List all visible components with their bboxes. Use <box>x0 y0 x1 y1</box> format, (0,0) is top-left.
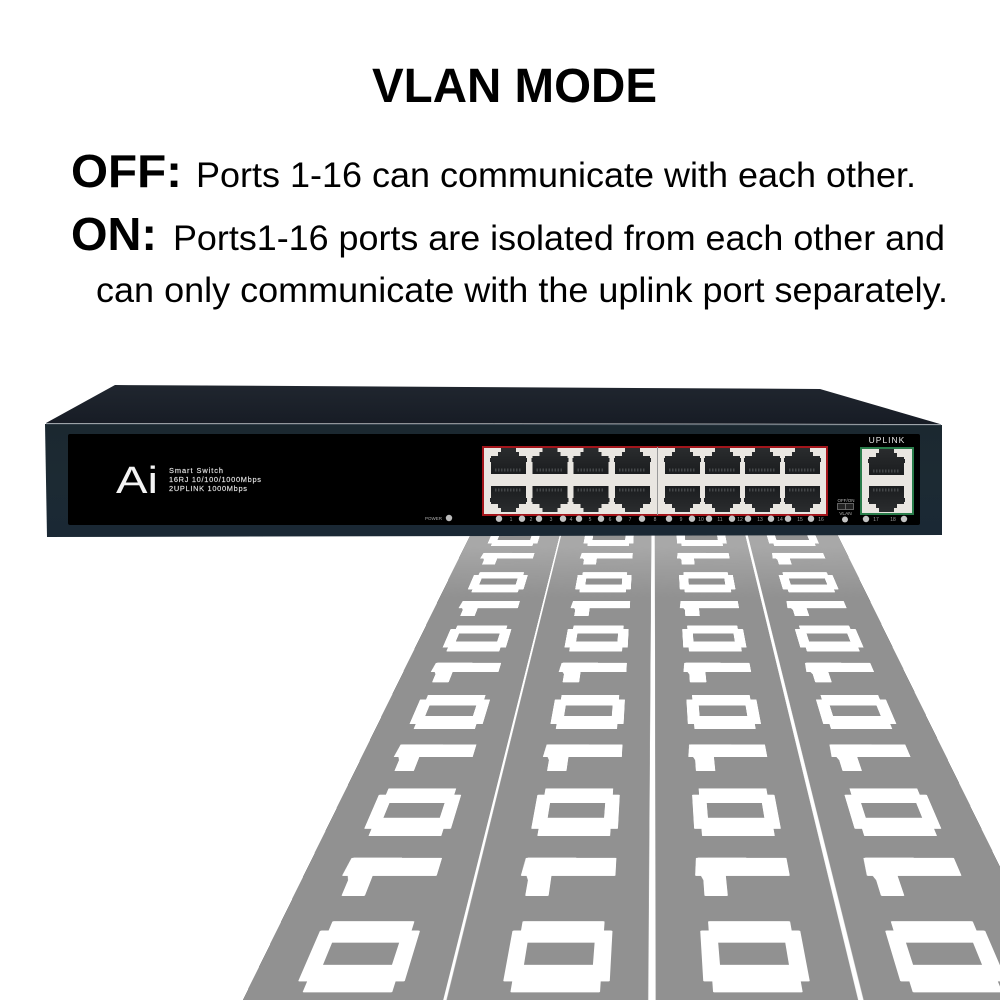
lane 1 digits: 1 <box>415 653 497 684</box>
ON mode text <box>71 208 948 310</box>
lane 2 digits: 0 <box>565 572 643 593</box>
port numbers: 12 <box>737 517 743 523</box>
OFF mode text <box>71 145 916 197</box>
port numbers: 16 <box>818 517 824 523</box>
black front panel <box>68 434 920 525</box>
model description <box>169 466 261 493</box>
lane 2 digits: 0 <box>515 787 638 837</box>
port numbers: 8 <box>654 517 657 523</box>
lane 4 digits: 1 <box>762 547 822 566</box>
port numbers: 1 <box>510 517 513 523</box>
lane 3 digits: 1 <box>669 547 725 566</box>
lane 4 digits: 1 <box>775 593 844 618</box>
lane 4 digits <box>757 529 1000 994</box>
ON mode text: ON: <box>71 208 157 260</box>
data road: four lanes of binary digits in perspective <box>243 529 1000 1000</box>
port numbers: 15 <box>797 517 803 523</box>
lane 1 digits: 0 <box>395 694 507 730</box>
lane 1 digits: 1 <box>317 838 438 900</box>
switch top face <box>46 385 940 424</box>
brand mark: Ai <box>116 460 158 502</box>
model description: 16RJ 10/100/1000Mbps <box>169 475 261 484</box>
lane 2 digits: 1 <box>502 838 607 900</box>
lane 3 digits <box>676 536 810 992</box>
lane 2 digits: 1 <box>546 653 620 684</box>
port numbers: 10 <box>698 517 704 523</box>
lane 2 digits: 0 <box>537 694 640 730</box>
lane 3 digits: 0 <box>675 694 778 730</box>
uplink LEDs and numbers: 17 <box>873 517 879 523</box>
lane 1 digits <box>298 536 540 992</box>
port numbers: 4 <box>570 517 573 523</box>
lane 3 digits: 0 <box>684 920 836 994</box>
lane divider 2 <box>648 516 656 1000</box>
model description: Smart Switch <box>169 466 223 475</box>
lane 3 digits: 1 <box>671 593 734 618</box>
lane 4 digits: 0 <box>829 787 964 837</box>
lane 3 digits: 0 <box>672 625 761 652</box>
lane 2 digits: 1 <box>571 547 627 566</box>
port numbers: 9 <box>680 517 683 523</box>
VLAN switch <box>838 498 854 522</box>
port LEDs <box>496 516 814 522</box>
switch front bezel <box>45 424 942 537</box>
ON mode text: can only communicate with the uplink port separately. <box>96 271 948 310</box>
lane 1 digits: 0 <box>346 787 481 837</box>
lane 3 digits: 0 <box>668 529 738 546</box>
uplink label: UPLINK <box>869 435 905 445</box>
uplink LEDs and numbers <box>863 516 907 523</box>
lane 1 digits: 1 <box>469 547 531 566</box>
port numbers: 11 <box>717 517 723 523</box>
port numbers: 2 <box>530 517 533 523</box>
lane 2 digits <box>503 536 634 992</box>
port numbers: 6 <box>609 517 612 523</box>
lane 1 digits: 0 <box>478 529 552 546</box>
lane 4 digits: 0 <box>803 694 915 730</box>
ON mode text: Ports1-16 ports are isolated from each other and <box>173 219 945 258</box>
VLAN switch: OFF/ON <box>838 498 854 503</box>
road surface <box>243 516 1000 1000</box>
lane 3 digits: 1 <box>673 653 746 684</box>
lane 1 digits: 0 <box>430 625 526 652</box>
uplink LEDs and numbers: 18 <box>890 517 896 523</box>
lane divider 3 <box>741 516 864 1000</box>
port numbers: 3 <box>550 517 553 523</box>
lane 4 digits: 0 <box>784 625 879 652</box>
lane divider 1 <box>443 516 566 1000</box>
lane 2 digits: 0 <box>575 529 645 546</box>
RJ45 ports 1-16 <box>490 448 821 512</box>
port numbers: 5 <box>589 517 592 523</box>
OFF mode text: Ports 1-16 can communicate with each other. <box>196 156 916 195</box>
lane 3 digits: 0 <box>679 787 802 837</box>
port numbers: 14 <box>777 517 783 523</box>
power indicator <box>425 515 452 521</box>
port numbers: 13 <box>757 517 763 523</box>
red port panel <box>483 447 827 515</box>
network switch <box>45 385 942 537</box>
OFF mode text: OFF: <box>71 145 182 197</box>
lane 1 digits: 1 <box>446 593 516 618</box>
title: VLAN MODE <box>372 60 657 113</box>
port numbers: 7 <box>629 517 632 523</box>
VLAN switch: VLAN <box>839 511 852 517</box>
lane 1 digits: 0 <box>457 572 540 593</box>
lane 2 digits: 1 <box>528 731 615 774</box>
lane 2 digits: 1 <box>560 593 624 618</box>
lane 4 digits: 1 <box>791 653 871 684</box>
uplink ports 17-18 <box>868 449 905 512</box>
lane 4 digits: 1 <box>813 731 909 774</box>
lane 4 digits: 0 <box>757 529 831 546</box>
lane 2 digits: 0 <box>483 920 635 994</box>
power indicator: POWER <box>425 516 443 521</box>
port numbers <box>510 517 824 523</box>
lane 1 digits: 1 <box>375 731 472 774</box>
lane 3 digits: 0 <box>670 572 748 593</box>
lane 3 digits: 1 <box>680 838 783 900</box>
lane 1 digits: 0 <box>275 920 445 994</box>
lane 3 digits: 1 <box>676 731 761 774</box>
lane 4 digits: 0 <box>769 572 852 593</box>
model description: 2UPLINK 1000Mbps <box>169 484 247 493</box>
green uplink panel <box>861 448 913 514</box>
lane 4 digits: 1 <box>843 838 961 900</box>
lane 2 digits: 0 <box>553 625 642 652</box>
